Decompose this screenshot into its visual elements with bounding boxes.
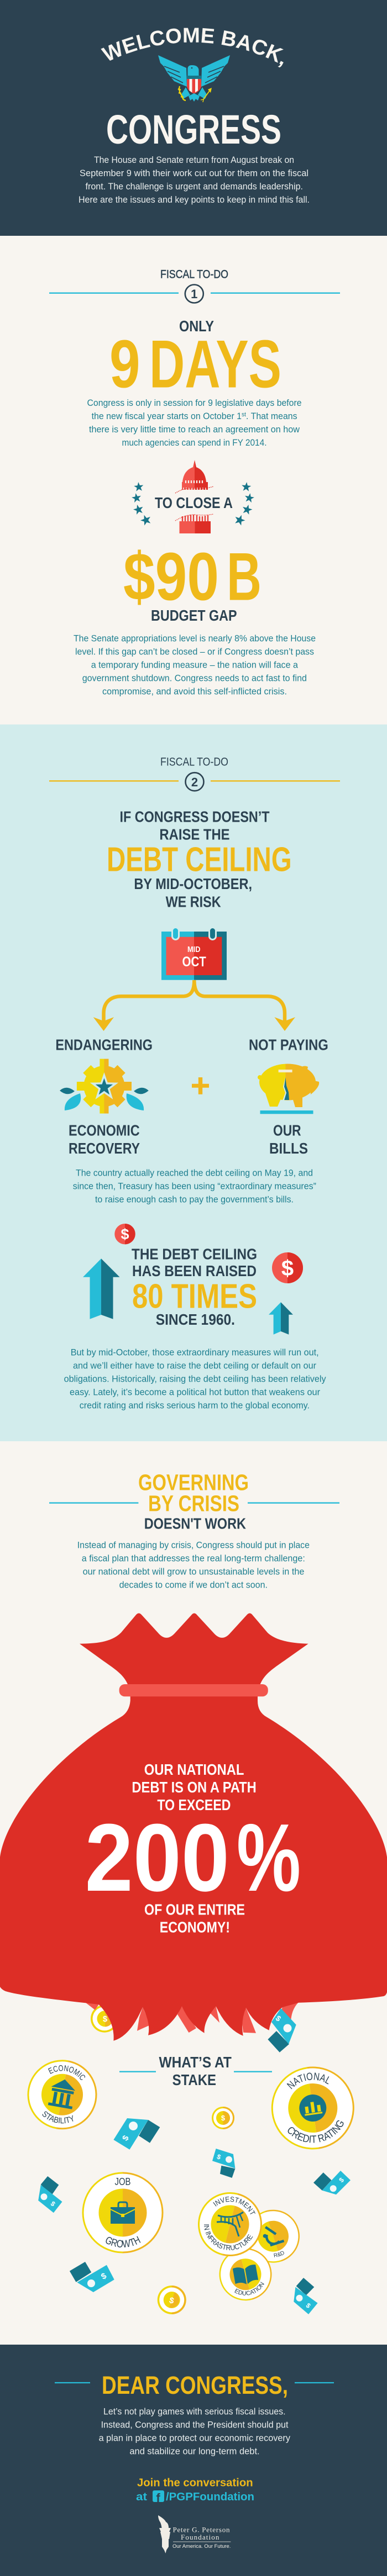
icon: eagle xyxy=(158,55,230,102)
callout: join the conversation: /PGPFoundation xyxy=(166,2491,254,2503)
badge: job growth: JOB xyxy=(115,2176,130,2187)
icon: small dollar coin: $ xyxy=(121,1226,129,1242)
icon: bill three: $ xyxy=(337,2176,346,2184)
badge: economic stability: STABILITY xyxy=(42,2112,73,2124)
badge: education xyxy=(219,2249,272,2300)
heading: raised 80 times: THE DEBT CEILING xyxy=(132,1246,257,1263)
logo: peterson foundation xyxy=(158,2515,231,2553)
icon: broken piggy bank xyxy=(258,1064,319,1114)
icon: torn lining of bag xyxy=(85,2002,299,2033)
badge: job growth xyxy=(82,2172,164,2253)
badge: investment in infrastructure: INVESTMENT xyxy=(213,2197,255,2214)
icon: bill two: $ xyxy=(216,2152,222,2161)
heading: governing by crisis xyxy=(49,1470,339,1532)
heading: raised 80 times: SINCE 1960. xyxy=(156,1311,235,1328)
text: budget gap paragraph: government shutdown. Congress needs to act fast to find xyxy=(82,673,307,684)
heading: what's at stake: STAKE xyxy=(172,2071,216,2088)
text: mid-october paragraph xyxy=(64,1347,326,1410)
text: intro paragraph: front. The challenge is urgent and demands leadership. xyxy=(85,181,303,192)
icon: big dollar coin xyxy=(272,1252,303,1283)
heading: not paying: NOT PAYING xyxy=(249,1036,328,1054)
badge: economic stability: ECONOMIC xyxy=(48,2065,85,2080)
heading: fiscal to-do 1: 1 xyxy=(191,287,197,301)
text: debt ceiling paragraph xyxy=(73,1167,316,1204)
callout: join the conversation: Join the conversation xyxy=(137,2477,253,2489)
heading: debt ceiling risk: IF CONGRESS DOESN’T xyxy=(119,808,270,825)
text: nine days paragraph: . That means xyxy=(246,411,297,421)
heading: fiscal to-do 2: 2 xyxy=(191,775,198,789)
text: mid-october paragraph: credit rating and risks serious harm to the global economy. xyxy=(80,1400,310,1410)
icon: calendar mid october: OCT xyxy=(182,954,206,970)
icon: bill five xyxy=(70,2262,114,2292)
icon: big dollar coin: $ xyxy=(281,1256,294,1281)
text: nine days paragraph: st xyxy=(242,411,246,418)
text: governing paragraph: a fiscal plan that addresses the real long-term challenge: xyxy=(82,1553,305,1563)
badge: national credit rating: CREDIT RATING xyxy=(287,2120,344,2143)
heading: governing by crisis: GOVERNING xyxy=(138,1470,249,1495)
logo: peterson foundation: Foundation xyxy=(181,2533,219,2541)
icon: small coin upper: $ xyxy=(221,2114,226,2122)
heading: congress: CONGRESS xyxy=(106,107,281,152)
text: mid-october paragraph: easy. Lately, it’s become a political hot button that weakens our xyxy=(70,1387,320,1397)
badge: R&D: R&D xyxy=(274,2251,284,2257)
text: nine days paragraph: there is very little time to reach an agreement on how xyxy=(89,424,300,435)
text: closing paragraph: a plan in place to protect our economic recovery xyxy=(99,2432,290,2443)
text: national debt 200 percent: OUR NATIONAL xyxy=(144,1761,244,1778)
badge: economic stability xyxy=(28,2060,97,2129)
text: budget gap paragraph: level. If this gap can’t be closed – or if Congress doesn’t pass xyxy=(75,647,314,657)
text: governing paragraph xyxy=(77,1540,310,1590)
badge: investment in infrastructure xyxy=(198,2192,262,2256)
icon: gear with star and leaves xyxy=(60,1059,149,1113)
icon: bill five: $ xyxy=(100,2271,108,2282)
text: mid-october paragraph: But by mid-October, those extraordinary measures will run out, xyxy=(71,1347,319,1357)
heading: only 9 days: 9 xyxy=(109,326,140,402)
heading: what's at stake: WHAT’S AT xyxy=(159,2054,232,2071)
heading: debt ceiling risk: RAISE THE xyxy=(159,826,230,843)
text: intro paragraph: The House and Senate return from August break on xyxy=(94,155,294,165)
icon: big up arrow xyxy=(83,1258,119,1319)
icon: bill one xyxy=(113,2118,160,2150)
icon: bill two xyxy=(212,2149,235,2178)
badge: education: EDUCATION xyxy=(234,2282,264,2295)
heading: what's at stake xyxy=(119,2054,272,2088)
icon: capitol dome xyxy=(175,460,213,533)
heading: 90 billion budget gap: $90 xyxy=(123,539,219,615)
heading: dear congress: DEAR CONGRESS, xyxy=(102,2371,288,2399)
icon: small coin upper xyxy=(212,2107,234,2129)
icon: calendar mid october: MID xyxy=(187,945,201,954)
badge: national credit rating xyxy=(271,2066,354,2149)
heading: endangering: ENDANGERING xyxy=(55,1036,153,1054)
icon: small coin lower xyxy=(158,2286,186,2314)
icon: coin falling from bag xyxy=(91,2005,118,2033)
text: governing paragraph: Instead of managing by crisis, Congress should put in place xyxy=(77,1540,310,1550)
text: nine days paragraph: Congress is only in session for 9 legislative days before xyxy=(87,398,302,408)
icon: bill six: $ xyxy=(305,2302,312,2310)
text: governing paragraph: decades to come if we don’t act soon. xyxy=(119,1579,268,1590)
badge: R&D xyxy=(250,2210,300,2263)
icon: red money bag xyxy=(0,1614,387,2041)
text: closing paragraph: Instead, Congress and the President should put xyxy=(101,2419,289,2430)
text: debt ceiling paragraph: The country actually reached the debt ceiling on May 19, and xyxy=(76,1167,313,1178)
heading: debt ceiling risk: WE RISK xyxy=(166,893,221,910)
heading: governing by crisis: BY CRISIS xyxy=(148,1491,239,1516)
text: debt ceiling paragraph: to raise enough cash to pay the government’s bills. xyxy=(95,1194,294,1204)
text: intro paragraph: Here are the issues and key points to keep in mind this fall. xyxy=(79,194,310,205)
heading: raised 80 times: 80 TIMES xyxy=(132,1277,257,1315)
icon: bill one: $ xyxy=(121,2134,131,2143)
heading: economic recovery: RECOVERY xyxy=(69,1140,140,1157)
heading: governing by crisis: DOESN'T WORK xyxy=(144,1515,246,1532)
heading: fiscal to-do 1: FISCAL TO-DO xyxy=(160,268,228,281)
text: budget gap paragraph: The Senate appropriations level is nearly 8% above the House xyxy=(74,633,316,644)
heading: our bills: BILLS xyxy=(269,1140,308,1157)
heading: our bills: OUR xyxy=(273,1122,301,1139)
text: national debt 200 percent: ECONOMY! xyxy=(160,1918,230,1935)
heading: fiscal to-do 2 xyxy=(49,756,340,791)
logo: peterson foundation: Peter G. Peterson xyxy=(172,2526,230,2534)
icon: bill four: $ xyxy=(49,2199,57,2208)
text: debt ceiling paragraph: since then, Treasury has been using “extraordinary measures” xyxy=(73,1181,316,1191)
text: budget gap paragraph: a temporary funding measure – the nation will face a xyxy=(91,660,299,670)
text: intro paragraph xyxy=(79,155,310,205)
text: mid-october paragraph: and we’ll either have to raise the debt ceiling or default on our xyxy=(73,1360,316,1371)
text: mid-october paragraph: obligations. Historically, raising the debt ceiling has been relatively xyxy=(64,1373,326,1384)
icon: bill four xyxy=(38,2176,62,2213)
text: nine days paragraph: the new fiscal year starts on October 1 xyxy=(92,411,252,421)
text: closing paragraph xyxy=(99,2406,290,2456)
text: budget gap paragraph: compromise, and avoid this self-inflicted crisis. xyxy=(102,686,287,697)
text: national debt 200 percent: TO EXCEED xyxy=(157,1796,231,1813)
heading: fiscal to-do 2: FISCAL TO-DO xyxy=(160,756,228,769)
title: welcome back: WELCOME BACK, xyxy=(101,28,284,67)
heading: only 9 days xyxy=(109,318,281,402)
icon: calendar mid october xyxy=(161,928,227,980)
text: closing paragraph: Let’s not play games with serious fiscal issues. xyxy=(103,2406,285,2416)
callout: join the conversation: at xyxy=(136,2491,147,2503)
icon: bag tie band xyxy=(119,1684,268,1696)
icon: coin falling from bag: $ xyxy=(103,2014,108,2024)
text: nine days paragraph xyxy=(87,398,302,448)
text: intro paragraph: September 9 with their work cut out for them on the fiscal xyxy=(80,168,308,178)
heading: fiscal to-do 1 xyxy=(49,268,340,303)
heading: debt ceiling risk xyxy=(107,808,292,910)
icon: plus sign xyxy=(192,1077,209,1094)
badge: investment in infrastructure: IN INFRASTRUCTURE xyxy=(204,2224,253,2251)
icon: small up arrow xyxy=(269,1302,293,1335)
text: national debt 200 percent: DEBT IS ON A PATH xyxy=(132,1779,257,1796)
heading: 90 billion budget gap: BUDGET GAP xyxy=(151,607,237,624)
heading: debt ceiling risk: BY MID-OCTOBER, xyxy=(134,875,252,892)
icon: small coin lower: $ xyxy=(168,2295,175,2306)
arrow: fork to two risks xyxy=(93,980,295,1031)
text: budget gap paragraph xyxy=(74,633,316,697)
text: governing paragraph: our national debt will grow to unsustainable levels in the xyxy=(83,1566,304,1577)
text: national debt 200 percent: OF OUR ENTIRE xyxy=(144,1901,245,1918)
heading: only 9 days: DAYS xyxy=(149,326,281,402)
heading: economic recovery: ECONOMIC xyxy=(69,1122,140,1139)
icon: bill six xyxy=(294,2278,318,2314)
callout: join the conversation xyxy=(136,2477,254,2505)
logo: peterson foundation: Our America. Our Future. xyxy=(172,2543,231,2549)
icon: stars around capitol xyxy=(131,482,255,526)
heading: only 9 days: ONLY xyxy=(179,318,214,335)
text: national debt 200 percent: 200 xyxy=(85,1803,229,1911)
heading: 90 billion budget gap: B xyxy=(227,539,262,615)
badge: national credit rating: NATIONAL xyxy=(286,2072,330,2090)
heading: raised 80 times: HAS BEEN RAISED xyxy=(132,1262,257,1279)
icon: bill falling from bag: $ xyxy=(274,2013,283,2023)
badge: job growth: GROWTH xyxy=(106,2236,140,2247)
heading: debt ceiling risk: DEBT CEILING xyxy=(107,840,292,879)
heading: economic recovery xyxy=(69,1122,140,1157)
callout: join the conversation: f xyxy=(156,2491,160,2505)
heading: our bills xyxy=(269,1122,308,1157)
text: national debt 200 percent: % xyxy=(237,1803,301,1911)
text: closing paragraph: and stabilize our long-term debt. xyxy=(129,2446,260,2456)
icon: small dollar coin xyxy=(114,1224,135,1244)
heading: to close a: TO CLOSE A xyxy=(155,494,233,511)
heading: raised 80 times xyxy=(132,1246,257,1328)
icon: bill falling from bag xyxy=(268,2008,296,2053)
icon: bill three xyxy=(313,2171,351,2194)
text: nine days paragraph: much agencies can spend in FY 2014. xyxy=(122,437,266,448)
text: national debt 200 percent xyxy=(85,1761,301,1935)
